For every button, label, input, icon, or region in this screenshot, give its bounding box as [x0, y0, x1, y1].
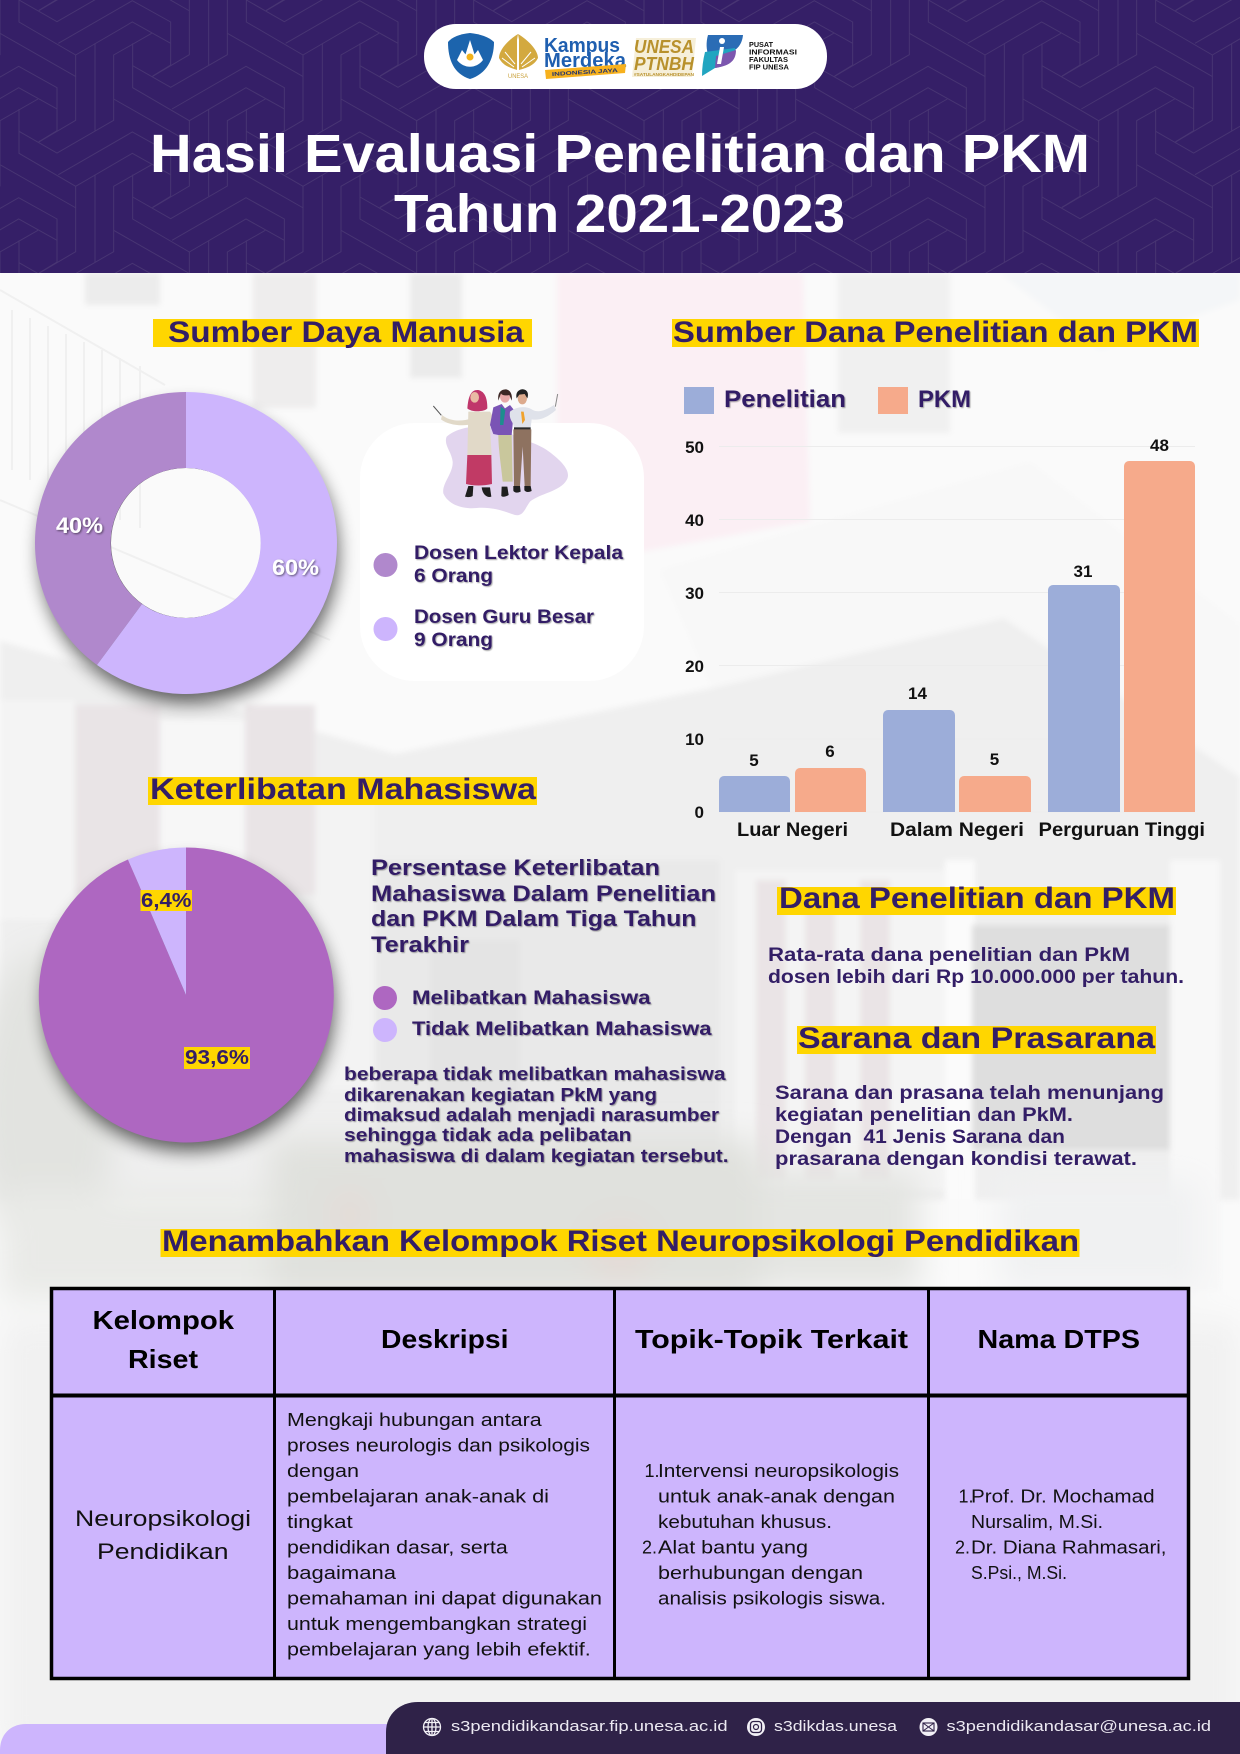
- cell: deskripsi: dengan: [287, 1461, 359, 1481]
- title: [150, 124, 1090, 244]
- logo: UNESA PTNBH: #SATULANGKAHDIDEPAN: [634, 72, 694, 77]
- cell: topik terkait: analisis psikologis siswa.: [658, 1588, 886, 1608]
- category labels: Perguruan Tinggi: [1038, 820, 1205, 841]
- logo: Kampus Merdeka: Merdeka: [544, 50, 627, 72]
- text: sarana dan prasarana: kegiatan penelitian dan PkM.: [775, 1105, 1073, 1126]
- heading: Dana Penelitian dan PKM: Dana Penelitian dan PKM: [779, 882, 1175, 915]
- cell: deskripsi: pemahaman ini dapat digunakan: [287, 1588, 602, 1608]
- legend: keterlibatan mahasiswa: [373, 986, 712, 1042]
- category labels: Luar Negeri: [737, 820, 848, 841]
- cell: nama dtps: 1.: [958, 1486, 974, 1506]
- title: Tahun 2021-2023: [394, 184, 845, 244]
- cell: kelompok riset: Pendidikan: [97, 1539, 228, 1564]
- cell: deskripsi: tingkat: [287, 1512, 353, 1532]
- bar value labels: 31: [1074, 562, 1092, 581]
- text: instagram: s3dikdas.unesa: [774, 1718, 898, 1735]
- cell: deskripsi: [287, 1410, 602, 1660]
- bar value labels: 48: [1150, 436, 1169, 455]
- cell: kelompok riset: Neuropsikologi: [75, 1506, 251, 1531]
- text: rata-rata dana: dosen lebih dari Rp 10.000.000 per tahun.: [768, 967, 1184, 988]
- icon: mail: [920, 1718, 938, 1736]
- bar value labels: [749, 436, 1169, 770]
- cell: topik terkait: 2.: [642, 1538, 657, 1558]
- y axis labels: 20: [685, 657, 704, 676]
- cell: deskripsi: pembelajaran yang lebih efektif.: [287, 1640, 591, 1660]
- cell: nama dtps: 2.: [955, 1538, 970, 1558]
- icon: globe: [424, 1718, 440, 1736]
- cell: nama dtps: [955, 1486, 1166, 1583]
- cell: nama dtps: Dr. Diana Rahmasari,: [971, 1538, 1166, 1558]
- label: 60%: 60%: [272, 555, 319, 580]
- logo: Kampus Merdeka: INDONESIA JAYA: [552, 68, 618, 78]
- text: penjelasan keterlibatan: dimaksud adalah menjadi narasumber: [344, 1105, 719, 1125]
- text: email: s3pendidikandasar@unesa.ac.id: [946, 1718, 1211, 1735]
- bar value labels: 6: [825, 742, 835, 761]
- text: pusat informasi fakultas: [749, 40, 797, 72]
- text: persentase keterlibatan heading: Mahasiswa Dalam Penelitian: [371, 881, 716, 906]
- heading: Sumber Dana Penelitian dan PKM: Sumber Dana Penelitian dan PKM: [673, 316, 1198, 349]
- chart legend: PKM: [918, 386, 971, 413]
- legend: lektor kepala: Dosen Lektor Kepala: [414, 543, 623, 564]
- text: persentase keterlibatan heading: dan PKM Dalam Tiga Tahun: [371, 906, 696, 931]
- category labels: [737, 820, 1205, 841]
- donut chart: dosen: [35, 392, 338, 703]
- cell: topik terkait: berhubungan dengan: [658, 1563, 863, 1583]
- y axis labels: 10: [685, 730, 704, 749]
- cell: topik terkait: Alat bantu yang: [658, 1538, 808, 1558]
- cell: deskripsi: pembelajaran anak-anak di: [287, 1486, 549, 1506]
- y axis labels: [685, 438, 704, 822]
- cell: topik terkait: [642, 1461, 899, 1608]
- chart legend: Penelitian: [724, 386, 846, 413]
- y axis labels: 40: [685, 511, 704, 530]
- text: penjelasan keterlibatan: sehingga tidak ada pelibatan: [344, 1125, 632, 1145]
- icon: UNESA wings logo: UNESA: [508, 73, 529, 80]
- heading: Sumber Daya Manusia: Sumber Daya Manusia: [168, 316, 524, 349]
- bar value labels: 5: [990, 750, 999, 769]
- icon: UNESA wings logo: [499, 34, 538, 80]
- legend: guru besar: [374, 607, 595, 651]
- label: 6,4%: 6,4%: [141, 890, 192, 912]
- legend: lektor kepala: 6 Orang: [414, 566, 493, 587]
- cell: deskripsi: untuk mengembangkan strategi: [287, 1614, 587, 1634]
- label: 40%: 40%: [56, 513, 103, 538]
- table: kelompok riset: [51, 1288, 1189, 1678]
- heading: Menambahkan Kelompok Riset: Menambahkan Kelompok Riset Neuropsikologi Pendidikan: [162, 1225, 1079, 1258]
- text: pusat informasi fakultas: INFORMASI: [749, 48, 797, 56]
- legend: guru besar: 9 Orang: [414, 630, 493, 651]
- table header row: [92, 1305, 1140, 1374]
- icon: pusat informasi logo: [702, 35, 743, 76]
- text: sarana dan prasarana: Dengan 41 Jenis Sarana dan: [775, 1127, 1065, 1148]
- footer accent: lavender bar: [0, 1724, 400, 1754]
- table header row: Riset: [128, 1344, 198, 1374]
- text: penjelasan keterlibatan: beberapa tidak melibatkan mahasiswa: [344, 1064, 727, 1084]
- cell: topik terkait: Intervensi neuropsikologis: [658, 1461, 899, 1481]
- text: sarana dan prasarana: Sarana dan prasana telah menunjang: [775, 1083, 1164, 1104]
- text: sarana dan prasarana: prasarana dengan kondisi terawat.: [775, 1149, 1137, 1170]
- logo: Kampus Merdeka: [544, 35, 627, 79]
- cell: deskripsi: bagaimana: [287, 1563, 397, 1583]
- icon: instagram: [747, 1718, 765, 1736]
- footer: contact bar: [386, 1702, 1240, 1754]
- text: persentase keterlibatan heading: Persentase Keterlibatan: [371, 855, 660, 880]
- text: sarana dan prasarana: [775, 1083, 1164, 1170]
- y axis labels: 50: [685, 438, 704, 457]
- text: penjelasan keterlibatan: dikarenakan kegiatan PkM yang: [344, 1085, 657, 1105]
- slice: guru besar 60%: [97, 392, 337, 694]
- cell: deskripsi: proses neurologis dan psikologis: [287, 1436, 590, 1456]
- legend: keterlibatan mahasiswa: Melibatkan Mahasiswa: [412, 988, 651, 1009]
- text: rata-rata dana: Rata-rata dana penelitian dan PkM: [768, 945, 1130, 966]
- title: Hasil Evaluasi Penelitian dan PKM: [150, 124, 1090, 184]
- text: website: s3pendidikandasar.fip.unesa.ac.id: [451, 1718, 728, 1735]
- logo strip: [424, 24, 827, 89]
- slice: lektor kepala 40%: [35, 392, 186, 665]
- y axis labels: 0: [695, 803, 704, 822]
- label: 93,6%: 93,6%: [185, 1047, 249, 1069]
- bar value labels: 5: [749, 751, 759, 770]
- cell: nama dtps: Prof. Dr. Mochamad: [971, 1486, 1155, 1506]
- text: penjelasan keterlibatan: [344, 1064, 728, 1166]
- cell: deskripsi: Mengkaji hubungan antara: [287, 1410, 543, 1430]
- category labels: Dalam Negeri: [890, 820, 1024, 841]
- legend: lektor kepala: [374, 543, 623, 587]
- text: pusat informasi fakultas: FAKULTAS: [749, 55, 788, 64]
- text: pusat informasi fakultas: FIP UNESA: [749, 62, 790, 72]
- bar chart: sumber dana: [684, 386, 1205, 841]
- text: rata-rata dana: [768, 945, 1184, 988]
- text: persentase keterlibatan heading: Terakhir: [371, 932, 470, 957]
- icon: Kemdikbud shield: [448, 33, 494, 79]
- chart legend: [684, 386, 971, 414]
- cell: deskripsi: pendidikan dasar, serta: [287, 1538, 509, 1558]
- panel: dosen legend card: [360, 389, 644, 681]
- legend: guru besar: Dosen Guru Besar: [414, 607, 595, 628]
- pie chart: keterlibatan mahasiswa: [39, 847, 334, 1151]
- logo: UNESA PTNBH: [632, 37, 696, 77]
- slice: tidak melibatkan 6.4%: [128, 848, 186, 995]
- cell: kelompok riset: [75, 1506, 251, 1564]
- heading: Keterlibatan Mahasiswa: Keterlibatan Mahasiswa: [150, 773, 536, 806]
- header band: [0, 0, 1240, 273]
- text: persentase keterlibatan heading: [371, 855, 716, 957]
- slice: melibatkan 93.6%: [39, 847, 334, 1142]
- table header row: Topik-Topik Terkait: [635, 1324, 908, 1354]
- cell: nama dtps: Nursalim, M.Si.: [971, 1512, 1103, 1532]
- icon: three lecturers illustration: [433, 389, 568, 515]
- cell: topik terkait: 1.: [644, 1461, 660, 1481]
- text: pusat informasi fakultas: PUSAT: [749, 40, 773, 49]
- cell: topik terkait: kebutuhan khusus.: [658, 1512, 832, 1532]
- cell: nama dtps: S.Psi., M.Si.: [971, 1563, 1067, 1583]
- bar value labels: 14: [908, 684, 927, 703]
- legend: keterlibatan mahasiswa: Tidak Melibatkan Mahasiswa: [412, 1019, 712, 1040]
- bars: [719, 461, 1195, 812]
- logo: UNESA PTNBH: PTNBH: [634, 54, 695, 74]
- heading: Sarana dan Prasarana: Sarana dan Prasarana: [798, 1022, 1155, 1055]
- logo: UNESA PTNBH: UNESA: [634, 37, 694, 57]
- table header row: Deskripsi: [381, 1324, 508, 1354]
- table header row: Nama DTPS: [978, 1324, 1140, 1354]
- table header row: Kelompok: [92, 1305, 235, 1335]
- logo: Kampus Merdeka: Kampus: [544, 35, 620, 57]
- text: penjelasan keterlibatan: mahasiswa di dalam kegiatan tersebut.: [344, 1146, 728, 1166]
- cell: topik terkait: untuk anak-anak dengan: [658, 1486, 895, 1506]
- y axis labels: 30: [685, 584, 704, 603]
